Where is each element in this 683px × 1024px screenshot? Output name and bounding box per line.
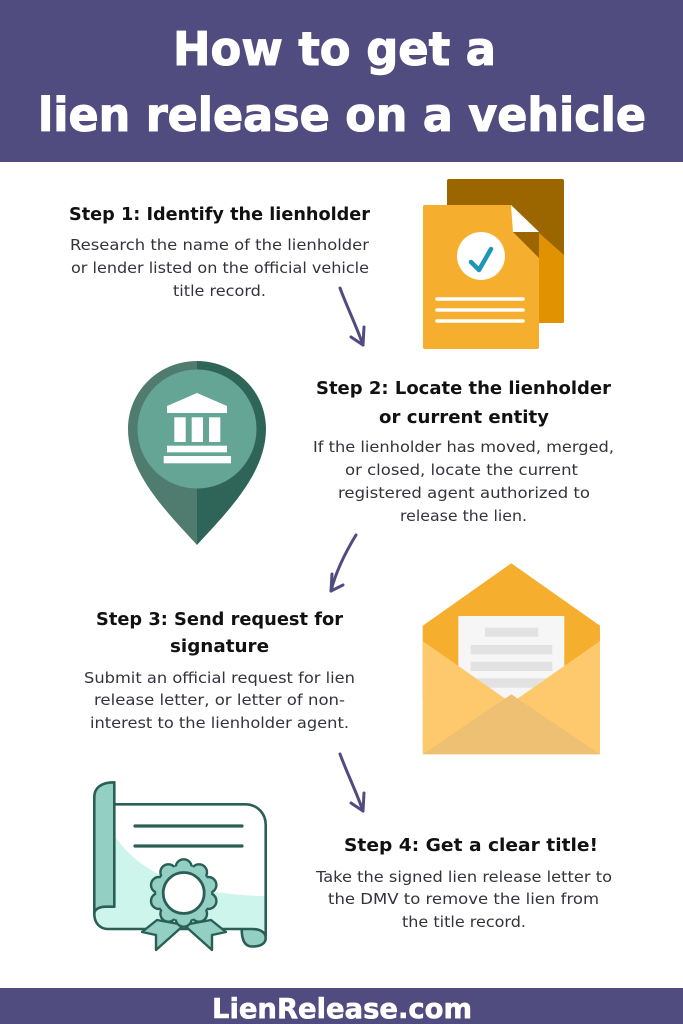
icon: documents with check mark	[423, 179, 564, 349]
seal rosette	[151, 859, 216, 927]
step 3 text: release letter, or letter of non-	[94, 691, 345, 709]
step 1 text: or lender listed on the official vehicle	[71, 259, 369, 277]
step 1 text	[69, 204, 370, 300]
title: How to get a	[173, 22, 496, 76]
step 4 text: Step 4: Get a clear title!	[344, 835, 598, 856]
step 2 text	[313, 378, 614, 525]
step 3 text: interest to the lienholder agent.	[90, 714, 349, 732]
step 4 text: the title record.	[402, 913, 526, 931]
ribbon	[142, 920, 226, 950]
icon: bank building	[164, 393, 231, 463]
arrow: step 1 to step 2	[340, 288, 364, 345]
step 3 text: Submit an official request for lien	[84, 669, 355, 687]
title: lien release on a vehicle	[38, 88, 646, 142]
header banner	[0, 0, 683, 162]
step 4 text: the DMV to remove the lien from	[328, 890, 599, 908]
step 1 text: Research the name of the lienholder	[70, 236, 370, 254]
step 2 text: or closed, locate the current	[345, 461, 578, 479]
step 2 text: or current entity	[379, 407, 549, 428]
step 2 text: If the lienholder has moved, merged,	[313, 438, 614, 456]
step 1 text: title record.	[173, 282, 266, 300]
arrow: step 2 to step 3	[331, 535, 356, 591]
step 1 text: Step 1: Identify the lienholder	[69, 204, 370, 225]
step 3 text	[84, 609, 355, 732]
arrow: step 3 to step 4	[340, 754, 364, 811]
step 3 text: signature	[170, 636, 269, 657]
icon: open envelope with letter	[423, 563, 600, 754]
icon: certificate scroll	[94, 782, 266, 950]
step 2 text: release the lien.	[400, 507, 527, 525]
footer banner	[0, 988, 683, 1024]
step 4 text: Take the signed lien release letter to	[315, 868, 612, 886]
icon: bank location pin	[128, 361, 266, 545]
step 3 text: Step 3: Send request for	[96, 609, 343, 630]
step 2 text: registered agent authorized to	[338, 484, 590, 502]
title	[38, 22, 646, 142]
step 4 text	[315, 835, 612, 931]
step 2 text: Step 2: Locate the lienholder	[316, 378, 611, 399]
